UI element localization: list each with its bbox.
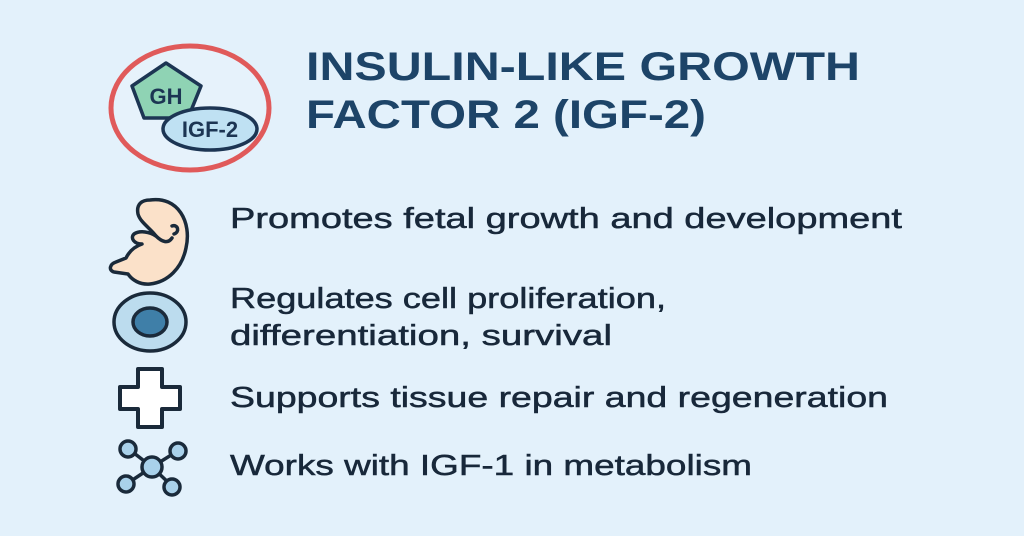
title: INSULIN-LIKE GROWTH (306, 45, 860, 89)
icon: fetus (110, 200, 187, 284)
icon: medical cross (120, 369, 180, 427)
icon: molecule network (118, 441, 186, 495)
text: differentiation, survival (230, 320, 612, 352)
text: metabolism: Works with IGF-1 in metabolism (230, 450, 752, 482)
text: FACTOR 2 (IGF-2) (306, 93, 706, 137)
icon: cell (114, 293, 186, 351)
icon: IGF-2 ellipse (163, 108, 257, 150)
icon: IGF-2 ellipse: IGF-2 (182, 117, 238, 142)
text: tissue repair: Supports tissue repair and regeneration (230, 382, 888, 414)
logo: GH and IGF-2 badge (111, 46, 269, 170)
text: fetal growth: Promotes fetal growth and development (230, 203, 902, 235)
text: cell proliferation: Regulates cell proliferation, (230, 283, 666, 315)
icon: GH pentagon: GH (150, 84, 182, 109)
icon: GH pentagon (132, 63, 201, 118)
